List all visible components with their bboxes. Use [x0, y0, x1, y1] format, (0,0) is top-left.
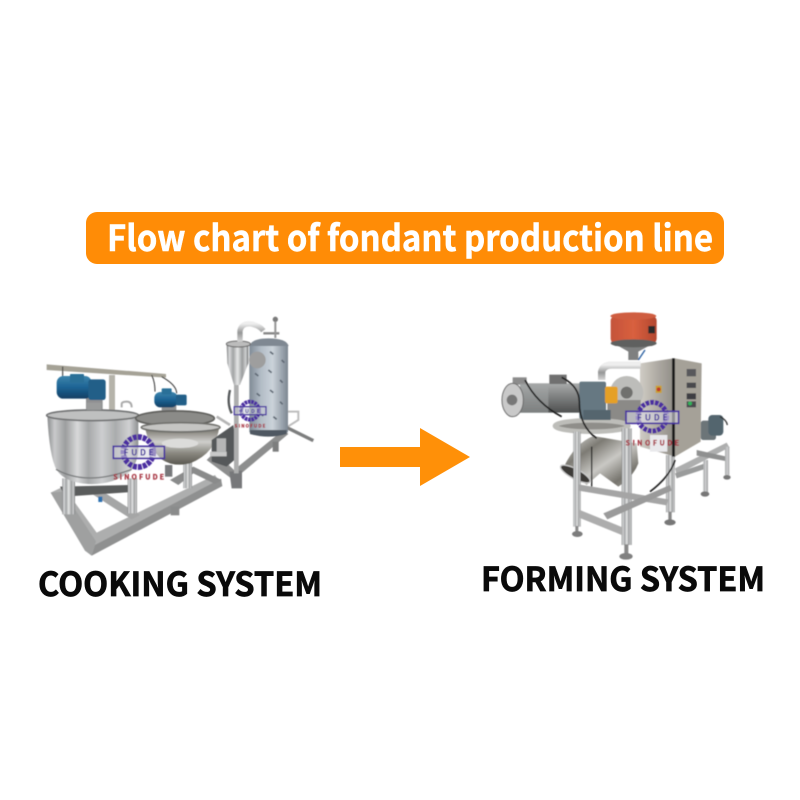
watermark logo: FUDE — [637, 412, 668, 424]
rear frame — [207, 429, 288, 488]
title text: Flow chart of fondant production line — [107, 211, 713, 262]
feed pipe — [602, 365, 641, 380]
rear pump — [701, 415, 727, 440]
tank — [47, 402, 139, 484]
cyclone separator — [226, 317, 279, 385]
rotor housing — [607, 376, 643, 423]
machine: forming system — [502, 312, 731, 560]
watermark logo: SINOFUDE — [626, 439, 679, 449]
watermark logo small: SINOFUDE — [235, 424, 266, 430]
vacuum vessel — [249, 338, 289, 437]
main base frame — [51, 453, 222, 556]
motor 1 — [57, 374, 106, 409]
drive motor — [502, 375, 618, 438]
overhead beam and post — [47, 364, 177, 410]
title banner — [86, 211, 724, 264]
rear support frame — [664, 443, 731, 525]
discharge chute — [558, 436, 675, 492]
watermark logo large: SINOFUDE — [113, 472, 164, 482]
watermark logo — [626, 402, 679, 449]
hopper with red heater — [610, 312, 657, 360]
kettle — [136, 411, 220, 465]
watermark logo large: FUDE — [124, 447, 154, 459]
watermark logo small: FUDE — [240, 407, 260, 415]
label: forming system: FORMING SYSTEM — [481, 553, 765, 601]
machine: cooking system — [47, 317, 313, 556]
control cabinet — [640, 358, 702, 457]
support ring — [555, 420, 628, 432]
watermark logo large — [113, 437, 164, 482]
watermark logo small — [234, 402, 266, 430]
label: cooking system: COOKING SYSTEM — [38, 558, 322, 606]
motor 2 — [154, 388, 187, 412]
flow arrow — [340, 428, 470, 486]
front legs and braces — [572, 428, 672, 560]
valves and pipework — [210, 385, 313, 473]
